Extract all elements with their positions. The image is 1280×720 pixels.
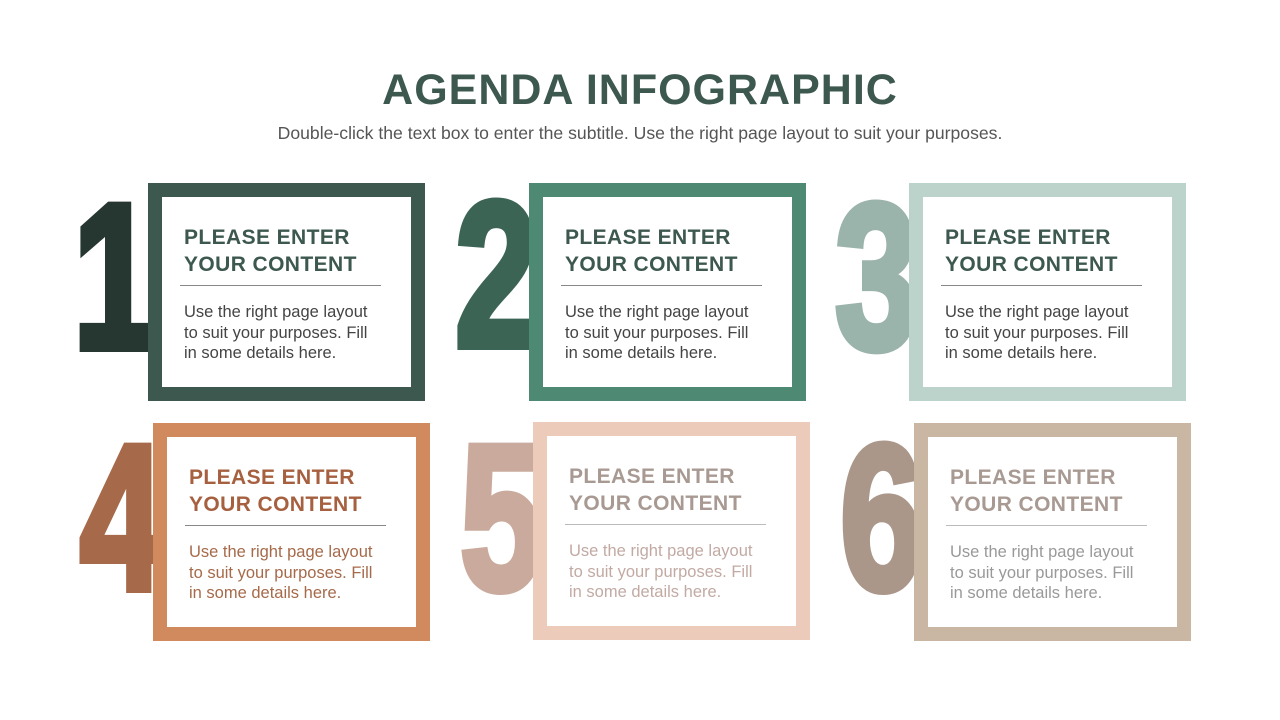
card 6: Use the right page layout to suit your purposes. Fill in some details here. (950, 543, 1133, 602)
card 3: PLEASE ENTER (945, 226, 1111, 249)
card 2: PLEASE ENTER (565, 226, 731, 249)
card 1 (148, 183, 425, 401)
card 5: YOUR CONTENT (569, 492, 742, 515)
card 5: PLEASE ENTER (569, 465, 735, 488)
card 6: PLEASE ENTER (950, 466, 1116, 489)
title: AGENDA INFOGRAPHIC (382, 66, 898, 114)
card 6 (914, 423, 1191, 641)
card 1: Use the right page layout to suit your purposes. Fill in some details here. (184, 303, 367, 362)
card 3 (909, 183, 1186, 401)
card 2 (529, 183, 806, 401)
number 4: 4 (80, 402, 163, 633)
card 1: YOUR CONTENT (184, 253, 357, 276)
number 2: 2 (455, 159, 538, 390)
card 4: Use the right page layout to suit your purposes. Fill in some details here. (189, 543, 372, 602)
subtitle: Double-click the text box to enter the subtitle. Use the right page layout to suit your purposes. (278, 123, 1002, 143)
card 2: Use the right page layout to suit your purposes. Fill in some details here. (565, 303, 748, 362)
number 1: 1 (73, 161, 156, 392)
card 5 (533, 422, 810, 640)
card 1: PLEASE ENTER (184, 226, 350, 249)
number 6: 6 (840, 402, 923, 633)
card 5: Use the right page layout to suit your purposes. Fill in some details here. (569, 542, 752, 601)
card 3: YOUR CONTENT (945, 253, 1118, 276)
card 6: YOUR CONTENT (950, 493, 1123, 516)
card 4: PLEASE ENTER (189, 466, 355, 489)
card 3: Use the right page layout to suit your purposes. Fill in some details here. (945, 303, 1128, 362)
card 2: YOUR CONTENT (565, 253, 738, 276)
number 5: 5 (460, 402, 543, 633)
card 4: YOUR CONTENT (189, 493, 362, 516)
number 3: 3 (835, 161, 918, 392)
card 4 (153, 423, 430, 641)
